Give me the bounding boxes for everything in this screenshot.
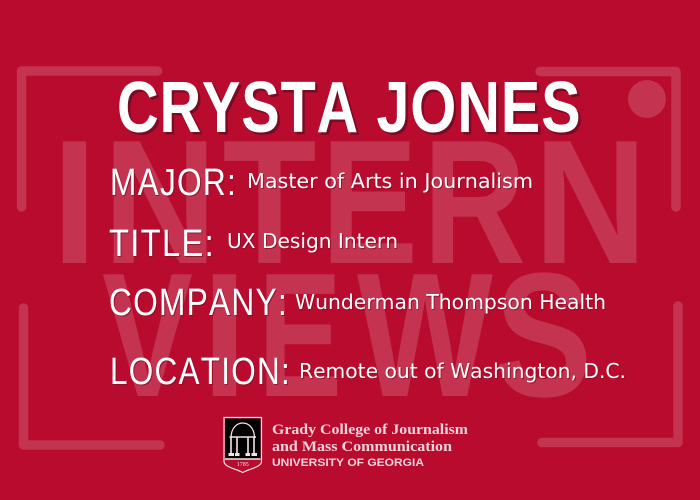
logo text	[272, 422, 468, 469]
row: location	[110, 351, 627, 394]
label: location: LOCATION:	[110, 351, 291, 393]
row: company	[109, 282, 607, 325]
title: name: CRYSTA	[120, 70, 362, 150]
watermark: INTERN	[52, 103, 647, 301]
value: major: Master of Arts in Journalism	[247, 169, 533, 193]
icon: arch shield: 1785	[237, 462, 249, 468]
watermark: VIEWS: S	[495, 236, 592, 434]
watermark: VIEWS: V	[102, 236, 193, 434]
decorative circle	[628, 80, 666, 118]
bracket: top right	[540, 72, 676, 207]
bracket: bottom right	[542, 306, 678, 442]
value: company: Wunderman Thompson Health	[295, 290, 606, 314]
watermark: INTERN: T	[222, 103, 316, 301]
watermark: INTERN: N	[103, 103, 217, 301]
label: company: COMPANY:	[109, 282, 288, 324]
row: title	[109, 223, 399, 266]
title: name	[117, 68, 584, 150]
label: title: TITLE:	[109, 223, 215, 265]
value: title: UX Design Intern	[227, 229, 398, 253]
label: title: TITLE:	[110, 224, 216, 266]
watermark: INTERN: R	[423, 103, 526, 301]
value: location: Remote out of Washington, D.C.	[299, 359, 626, 383]
title: name: JONES	[376, 68, 582, 148]
bracket: bottom left	[24, 308, 160, 445]
watermark: INTERN: N	[534, 103, 647, 301]
label: major: MAJOR:	[110, 162, 237, 204]
logo: Grady College	[224, 418, 468, 472]
label: company: COMPANY:	[110, 283, 289, 325]
watermark: VIEWS: E	[258, 236, 342, 434]
bracket: top left	[22, 71, 158, 207]
value: major: Master of Arts in Journalism	[248, 170, 534, 194]
logo text: and Mass Communication	[272, 439, 452, 455]
watermark: VIEWS: W	[357, 236, 493, 434]
value: title: UX Design Intern	[228, 230, 399, 254]
watermark: INTERN: E	[321, 103, 418, 301]
logo text: Grady College of Journalism	[272, 422, 468, 438]
watermark: VIEWS: I	[202, 236, 247, 434]
icon: arch shield	[224, 418, 262, 472]
watermark: INTERN: I	[52, 103, 97, 301]
label: location: LOCATION:	[111, 352, 292, 394]
watermark: VIEWS	[102, 236, 592, 434]
row: major	[110, 162, 534, 205]
value: location: Remote out of Washington, D.C.	[300, 360, 627, 384]
label: major: MAJOR:	[111, 163, 238, 205]
value: company: Wunderman Thompson Health	[296, 291, 607, 315]
logo text: UNIVERSITY OF GEORGIA	[272, 457, 424, 469]
title: name: CRYSTA	[117, 68, 359, 148]
title: name: JONES	[379, 70, 584, 150]
